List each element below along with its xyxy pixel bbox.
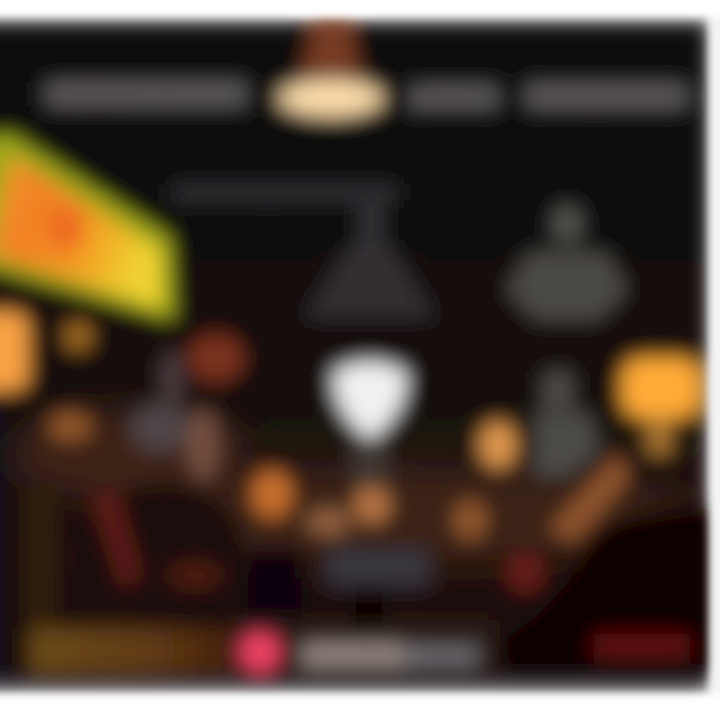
right white edge	[709, 0, 720, 720]
left dark edge	[0, 400, 6, 685]
icon: right hanging lamp	[506, 205, 628, 320]
sign: yellow and orange board	[0, 134, 174, 320]
floor centre	[235, 620, 495, 676]
subheading: Subheading text line	[172, 184, 348, 204]
heading: Search of	[48, 78, 186, 111]
icon: lower grey lamp	[534, 372, 600, 476]
logo: brand mark and wordmark: BrandName	[302, 645, 414, 667]
icon: orange lamp left	[0, 312, 92, 440]
logo: brand mark and wordmark	[240, 632, 478, 672]
diners: blurred figures	[130, 334, 630, 542]
icon: central hanging lamp	[304, 204, 436, 485]
accent: red cushion	[507, 552, 543, 592]
bottom band	[0, 680, 710, 692]
icon: orange lamp right	[622, 358, 700, 454]
warm ambient band	[100, 465, 700, 565]
table: central table and stand	[248, 548, 430, 626]
sofa: dark red seating on the left	[85, 483, 245, 627]
icon: hanging lamp over heading	[279, 15, 383, 116]
warm ambient left	[10, 410, 250, 500]
chair: dark foreground seat at right	[500, 509, 720, 676]
heading	[46, 78, 686, 113]
bottom white edge	[0, 694, 720, 720]
floor	[30, 628, 235, 674]
icon: small orange glow	[480, 422, 516, 468]
top white edge	[0, 0, 720, 17]
label: red text at lower right	[594, 634, 690, 658]
floor side	[28, 490, 54, 625]
heading: your	[410, 82, 466, 112]
heading: restaurant	[526, 80, 673, 113]
